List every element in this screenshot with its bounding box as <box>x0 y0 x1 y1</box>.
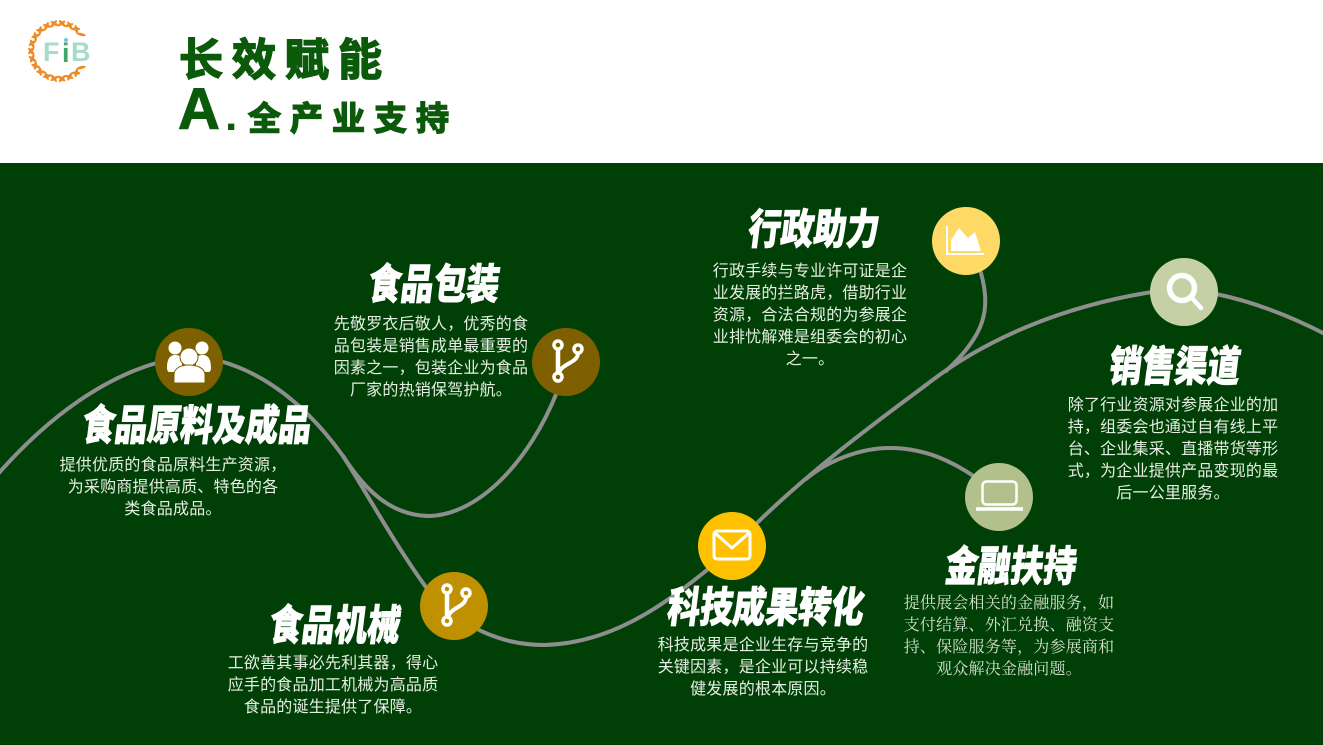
text: 食品包装 description: 厂家的热销保驾护航。 <box>350 382 512 399</box>
text: 科技成果转化 description: 关键因素，是企业可以持续稳 <box>658 659 868 676</box>
text: 食品原料及成品 description: 类食品成品。 <box>124 501 222 518</box>
text: 金融扶持 description <box>904 594 1114 678</box>
node: 食品机械 icon branch <box>420 572 488 640</box>
text: 销售渠道 description <box>1068 396 1278 502</box>
text: 行政助力 description: 行政手续与专业许可证是企 <box>713 263 907 280</box>
text: 行政助力 description: 之一。 <box>786 351 834 368</box>
text: 金融扶持 description: 持、保险服务等，为参展商和 <box>904 639 1114 656</box>
text: 食品机械 description: 应手的食品加工机械为高品质 <box>228 677 438 694</box>
subtitle letter A: A <box>178 77 220 142</box>
text: 食品包装 description <box>334 315 528 399</box>
heading: 销售渠道: 销售渠道 <box>1107 343 1243 390</box>
text: 行政助力 description: 资源，合法合规的为参展企 <box>713 307 907 324</box>
text: 科技成果转化 description: 科技成果是企业生存与竞争的 <box>658 637 868 654</box>
node: 金融扶持 icon laptop <box>965 463 1033 531</box>
text: 食品包装 description: 先敬罗衣后敬人，优秀的食 <box>334 316 528 333</box>
text: 科技成果转化 description: 健发展的根本原因。 <box>690 681 836 698</box>
text: 食品机械 description: 食品的诞生提供了保障。 <box>244 699 422 716</box>
node: 食品包装 icon branch <box>532 328 600 396</box>
panel: dark green background <box>0 163 1323 745</box>
heading: 食品包装: 食品包装 <box>366 261 502 308</box>
text: 金融扶持 description: 提供展会相关的金融服务，如 <box>904 595 1114 612</box>
heading: 行政助力: 行政助力 <box>746 206 882 253</box>
text: 销售渠道 description: 除了行业资源对参展企业的加 <box>1068 397 1278 414</box>
heading: 科技成果转化: 科技成果转化 <box>665 584 867 631</box>
text: 销售渠道 description: 持，组委会也通过自有线上平 <box>1068 419 1278 436</box>
text: 食品包装 description: 品包装是销售成单最重要的 <box>334 338 528 355</box>
text: 金融扶持 description: 观众解决金融问题。 <box>936 661 1082 678</box>
heading: 食品机械: 食品机械 <box>267 602 403 649</box>
subtitle text: 全产业支持 <box>248 100 458 137</box>
text: 行政助力 description: 业发展的拦路虎，借助行业 <box>713 285 907 302</box>
node: 科技成果转化 icon envelope <box>698 512 766 580</box>
subtitle: A. 全产业支持 <box>178 77 458 142</box>
text: 食品原料及成品 description <box>60 456 286 518</box>
text: 金融扶持 description: 支付结算、外汇兑换、融资支 <box>904 617 1114 634</box>
node: 销售渠道 icon magnifier <box>1150 258 1218 326</box>
node: 行政助力 icon area chart <box>932 207 1000 275</box>
text: 销售渠道 description: 式，为企业提供产品变现的最 <box>1068 463 1278 480</box>
text: 食品机械 description <box>228 654 438 716</box>
text: 食品机械 description: 工欲善其事必先利其器，得心 <box>228 655 438 672</box>
text: 行政助力 description: 业排忧解难是组委会的初心 <box>713 329 907 346</box>
text: 销售渠道 description: 台、企业集采、直播带货等形 <box>1068 441 1278 458</box>
title: 长效赋能: 长效赋能 <box>179 36 391 85</box>
logo: FIB wheat wreath: F <box>43 37 60 67</box>
heading: 食品原料及成品: 食品原料及成品 <box>79 402 315 449</box>
node: 食品原料及成品 icon people <box>155 328 223 396</box>
text: 销售渠道 description: 后一公里服务。 <box>1116 485 1230 502</box>
logo: FIB wheat wreath: i <box>62 38 70 68</box>
logo: FIB wheat wreath <box>28 20 90 82</box>
text: 食品原料及成品 description: 为采购商提供高质、特色的各 <box>68 479 278 496</box>
subtitle period: . <box>227 103 235 136</box>
text: 行政助力 description <box>713 262 907 368</box>
logo: FIB wheat wreath: B <box>71 37 90 67</box>
heading: 金融扶持: 金融扶持 <box>943 543 1079 590</box>
text: 食品包装 description: 因素之一，包装企业为食品 <box>334 360 528 377</box>
text: 科技成果转化 description <box>658 636 868 698</box>
text: 食品原料及成品 description: 提供优质的食品原料生产资源， <box>60 457 286 474</box>
